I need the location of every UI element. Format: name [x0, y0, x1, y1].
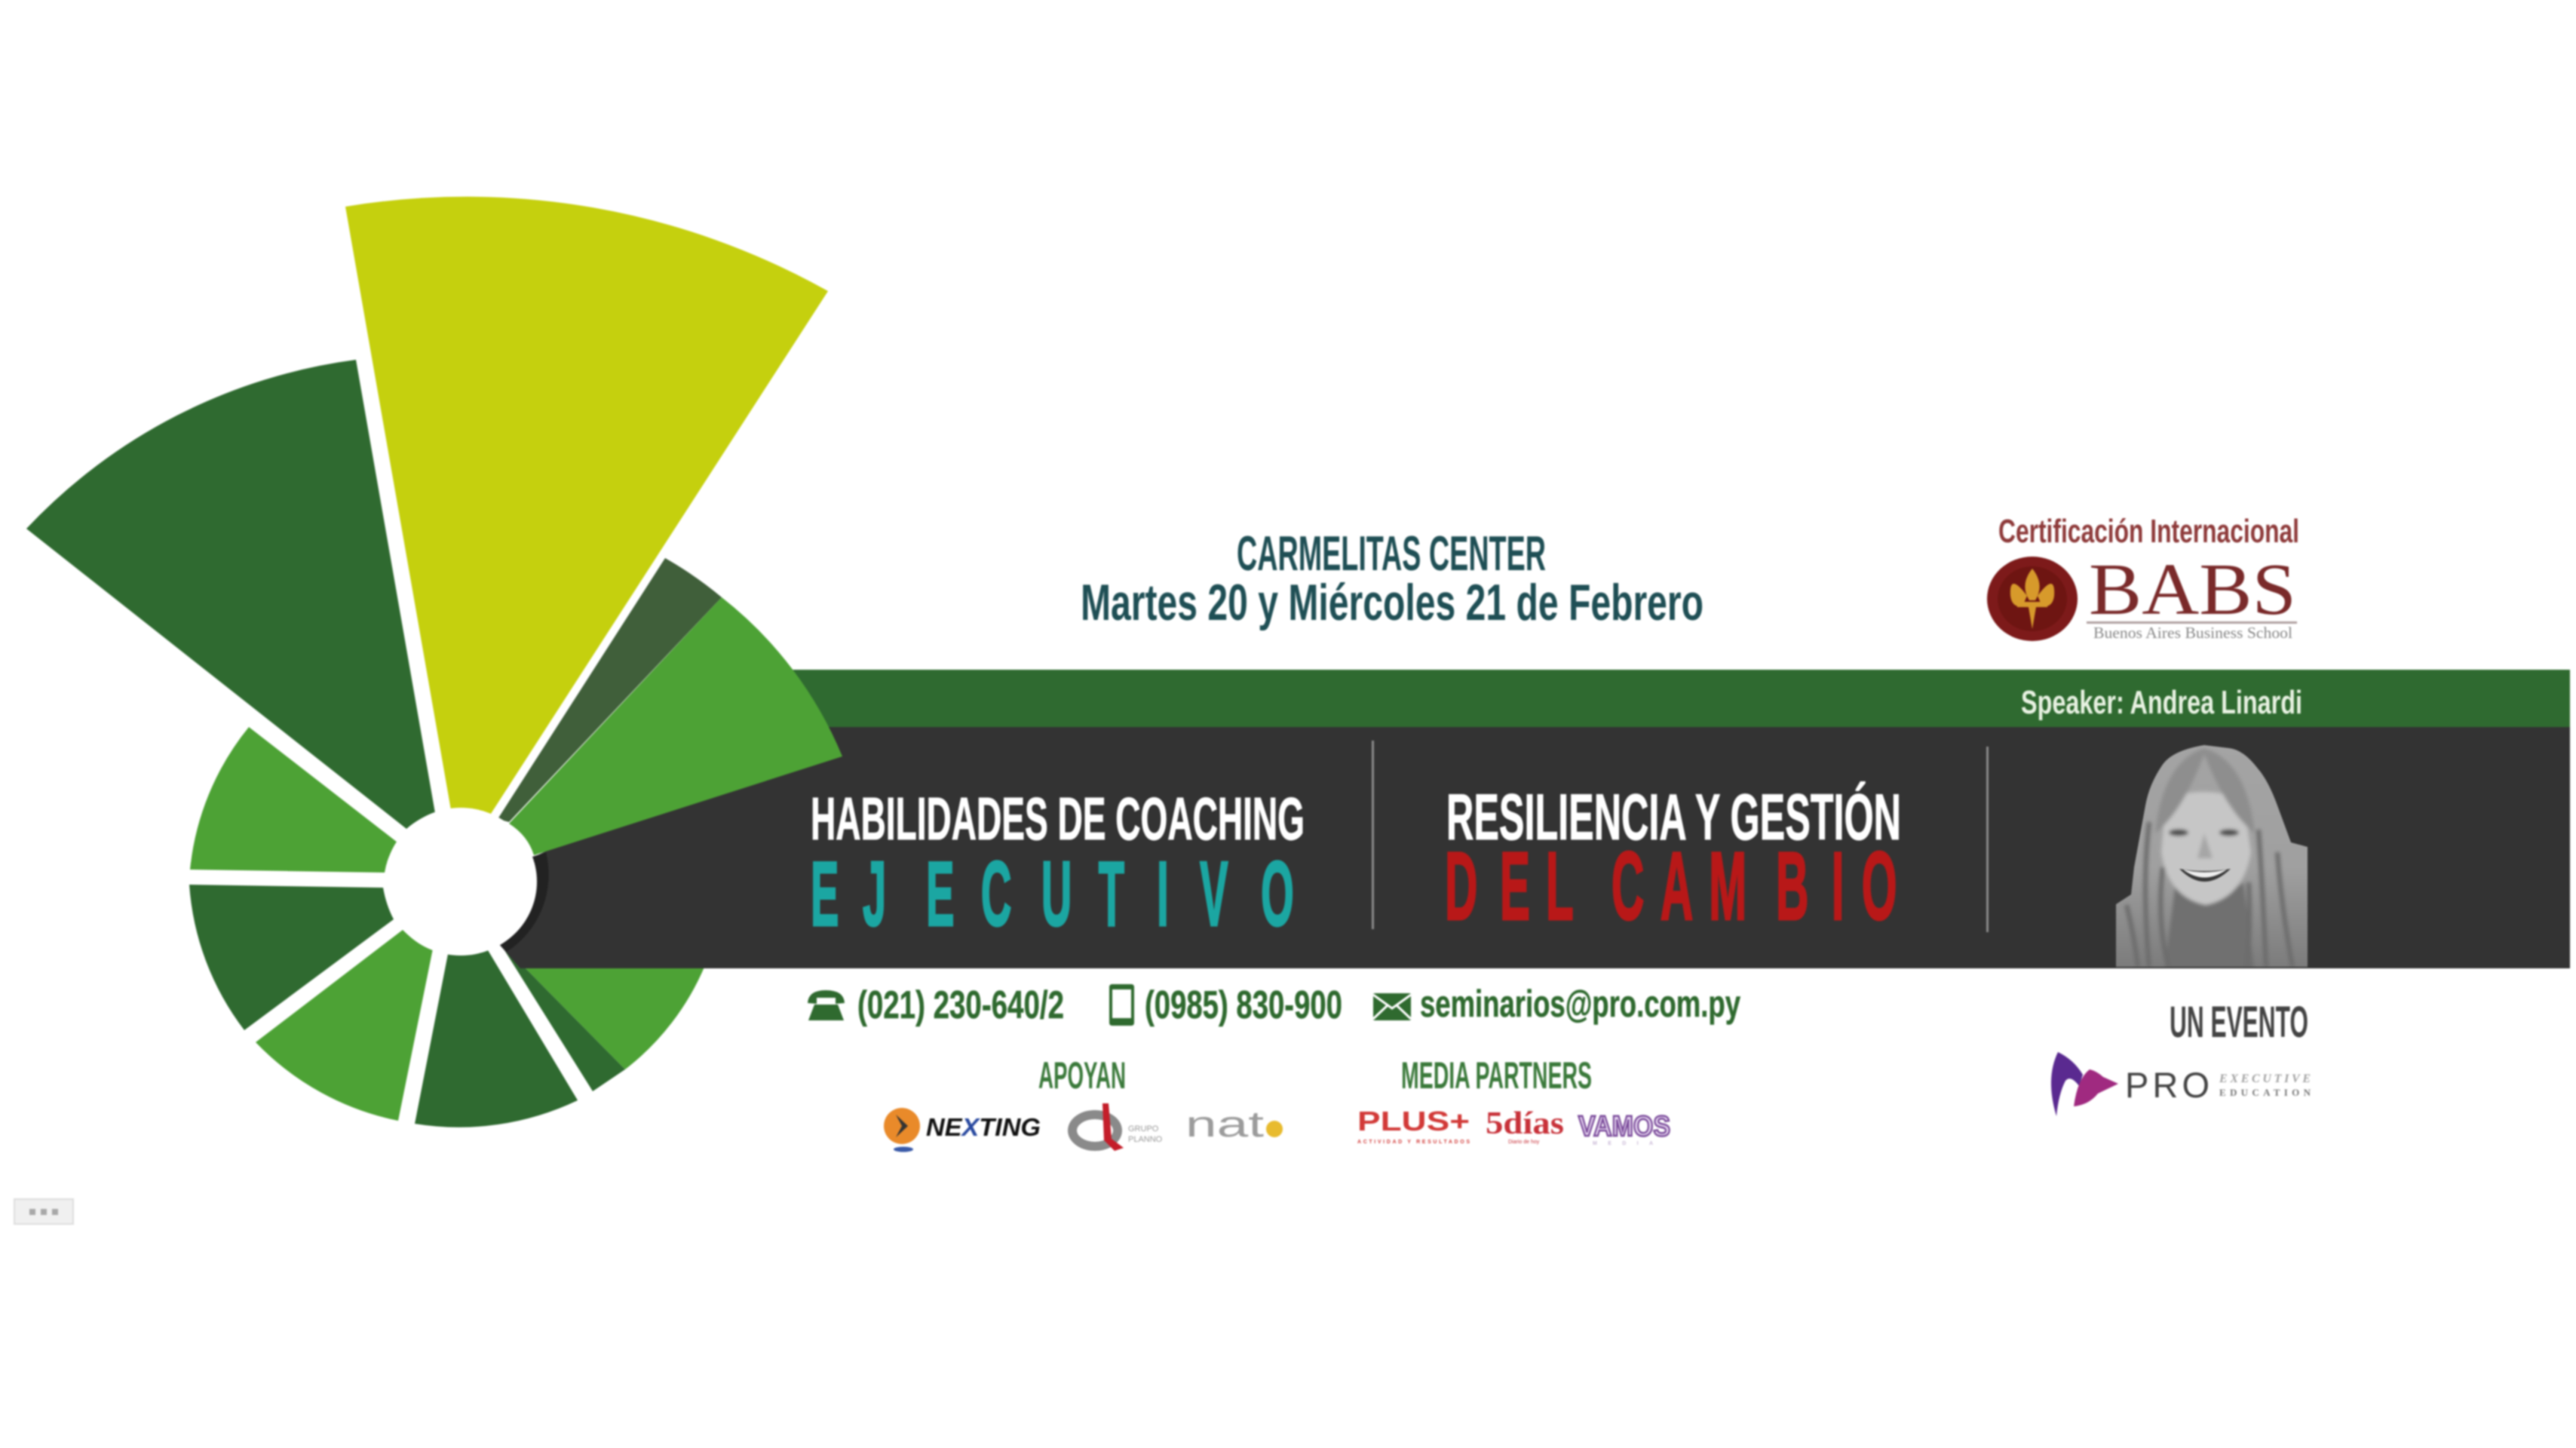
venue and date heading: Martes 20 y Miércoles 21 de Febrero — [1081, 574, 1704, 631]
logo: Plus+: PLUS+ — [1357, 1106, 1470, 1137]
email address: seminarios@pro.com.py — [1420, 983, 1740, 1025]
hub shadow — [498, 852, 549, 952]
organiser heading: UN EVENTO — [2170, 998, 2308, 1047]
wedge: dark green left — [189, 885, 394, 1030]
ellipsis button — [14, 1199, 73, 1224]
divider two — [1986, 747, 1989, 932]
wedge: dark green large — [26, 360, 435, 829]
logo: nat: nat — [1185, 1105, 1264, 1145]
course title: coaching: HABILIDADES DE COACHING — [811, 785, 1305, 852]
logo: Plus+: ACTIVIDAD Y RESULTADOS — [1357, 1140, 1470, 1145]
green speaker bar — [784, 670, 2570, 728]
contact row — [808, 983, 1740, 1027]
venue and date heading — [1081, 526, 1704, 631]
icon: envelope — [1373, 993, 1411, 1020]
icon: telephone — [808, 990, 845, 1020]
phone number: (021) 230-640/2 — [857, 983, 1064, 1027]
logo: PRO Executive Education — [2051, 1052, 2311, 1116]
logo: BABS: Buenos Aires Business School — [2093, 624, 2292, 642]
speaker portrait — [2116, 745, 2308, 973]
mobile number: (0985) 830-900 — [1145, 983, 1342, 1027]
course title: coaching — [811, 785, 1305, 946]
logo: Plus+ — [1357, 1106, 1470, 1145]
logo: 5dias: Diario de hoy — [1508, 1140, 1540, 1145]
wedge: light green left — [190, 727, 397, 873]
dark title bar — [498, 727, 2570, 968]
logo: Nexting — [884, 1108, 1041, 1152]
media partners heading: MEDIA PARTNERS — [1401, 1054, 1592, 1097]
course title: resiliencia: DEL CAMBIO — [1445, 833, 1897, 940]
lower wedges: green fan under the bar — [501, 944, 705, 1091]
certification heading: Certificación Internacional — [1998, 513, 2299, 550]
logo: BABS: BABS — [2089, 549, 2296, 630]
logo: nat — [1185, 1105, 1283, 1145]
logo: BABS — [1987, 549, 2297, 642]
wedge: yellow large — [345, 197, 828, 816]
divider one — [1372, 741, 1374, 929]
logo: PRO Executive Education: EXECUTIVE — [2219, 1072, 2311, 1085]
supporters heading: APOYAN — [1038, 1054, 1126, 1097]
wedge: light green bottom left — [256, 930, 433, 1121]
wedge: muted green upper right — [498, 558, 722, 822]
icon: mobile — [1109, 984, 1134, 1026]
course title: coaching: EJECUTIVO — [811, 843, 1294, 946]
logo: grupo: PLANNO — [1128, 1135, 1163, 1144]
course title: resiliencia — [1445, 781, 1901, 940]
course title: resiliencia: RESILIENCIA Y GESTIÓN — [1446, 781, 1901, 854]
logo: PRO Executive Education: PRO — [2125, 1065, 2210, 1105]
logo: PRO Executive Education: EDUCATION — [2219, 1087, 2311, 1098]
venue and date heading: CARMELITAS CENTER — [1237, 526, 1546, 581]
white hub circle — [385, 808, 537, 956]
logo: media purple: VAMOS — [1578, 1111, 1670, 1143]
infographic canvas — [13, 195, 2571, 1226]
wedge: dark green bottom — [415, 950, 578, 1127]
logo: 5dias: 5días — [1486, 1106, 1564, 1141]
speaker name: Speaker: Andrea Linardi — [2021, 684, 2302, 721]
logo: grupo — [1072, 1103, 1163, 1151]
logo: Nexting: NEXTING — [926, 1113, 1041, 1141]
wedge: light green upper right — [509, 597, 842, 855]
pie fan wedges — [26, 197, 842, 1127]
logo: media purple: MEDIA — [1593, 1141, 1653, 1146]
logo: grupo: GRUPO — [1128, 1124, 1159, 1134]
